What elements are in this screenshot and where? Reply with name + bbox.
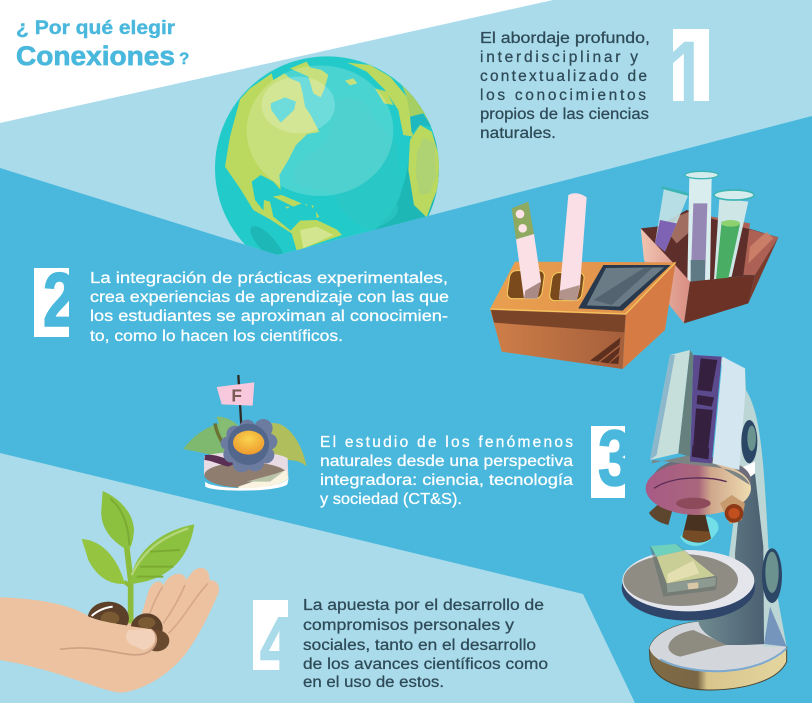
text block 3: y sociedad (CT&S).	[320, 491, 462, 508]
number tile 2: 2	[43, 258, 76, 343]
icon: microscope	[622, 350, 787, 690]
finger creases	[150, 583, 208, 633]
text block 4: de los avances científicos como	[303, 656, 548, 673]
Europe	[347, 63, 413, 137]
number tile 4: 4	[260, 602, 294, 687]
stage	[622, 544, 755, 621]
Hudson bay	[271, 97, 296, 123]
text block 1: interdisciplinar y	[480, 49, 638, 66]
text block 2: La integración de prácticas experimentales,	[90, 270, 448, 287]
tube left	[655, 187, 690, 252]
text block 1: contextualizado de	[480, 68, 647, 85]
text block 1: propios de las ciencias	[480, 106, 649, 123]
soil	[88, 602, 169, 651]
thumb	[0, 597, 156, 670]
text block 1: El abordaje profundo,	[480, 30, 650, 47]
text block 4: sociales, tanto en el desarrollo	[303, 637, 536, 654]
flower	[221, 419, 277, 472]
Greenland	[290, 62, 328, 97]
icon: test tube rack	[490, 171, 778, 369]
stick green	[512, 202, 541, 299]
Africa	[408, 125, 439, 217]
stick pink	[559, 193, 587, 301]
Caribbean	[273, 195, 319, 218]
text block 4: compromisos personales y	[303, 617, 514, 634]
title: ?	[179, 49, 189, 68]
number tile 3: 3	[598, 413, 632, 502]
text block 2: to, como lo hacen los científicos.	[90, 328, 343, 345]
number tile 1: 1	[667, 20, 707, 134]
text block 1	[480, 30, 650, 142]
text block 2	[90, 270, 449, 345]
arm	[720, 357, 787, 647]
title: ¿ Por qué elegir	[16, 18, 176, 39]
North and Central America	[225, 71, 342, 251]
text block 3	[320, 434, 573, 508]
title: Conexiones	[16, 41, 175, 71]
base	[649, 622, 787, 690]
text block 2: los estudiantes se aproximan al conocimien-	[90, 308, 448, 325]
text block 3: El estudio de los fenómenos	[320, 434, 573, 451]
objectives	[680, 517, 719, 546]
nosepiece disc	[652, 457, 751, 503]
title	[16, 18, 189, 71]
text block 3: integradora: ciencia, tecnología	[320, 472, 573, 489]
icon: hand with seedling	[0, 491, 219, 693]
hand	[0, 568, 219, 693]
text block 1: naturales.	[480, 125, 556, 142]
icon: petri dish with flower	[183, 375, 307, 491]
text block 1: los conocimientos	[480, 87, 646, 104]
tube middle	[685, 171, 718, 282]
orange box	[490, 262, 676, 369]
flag: F	[231, 386, 242, 406]
tube body	[650, 350, 750, 485]
text block 2: crea experiencias de aprendizaje con las que	[90, 289, 449, 306]
icon: globe	[215, 56, 439, 255]
focus knob	[741, 420, 782, 603]
globe highlights	[247, 65, 393, 196]
text block 4: La apuesta por el desarrollo de	[303, 597, 544, 614]
seedling	[82, 491, 194, 623]
tube right	[714, 190, 754, 279]
knob small	[720, 495, 745, 524]
South America inner	[300, 227, 333, 248]
text block 4: en el uso de estos.	[303, 674, 444, 691]
text block 3: naturales desde una perspectiva	[320, 453, 573, 470]
text block 4	[303, 597, 548, 691]
